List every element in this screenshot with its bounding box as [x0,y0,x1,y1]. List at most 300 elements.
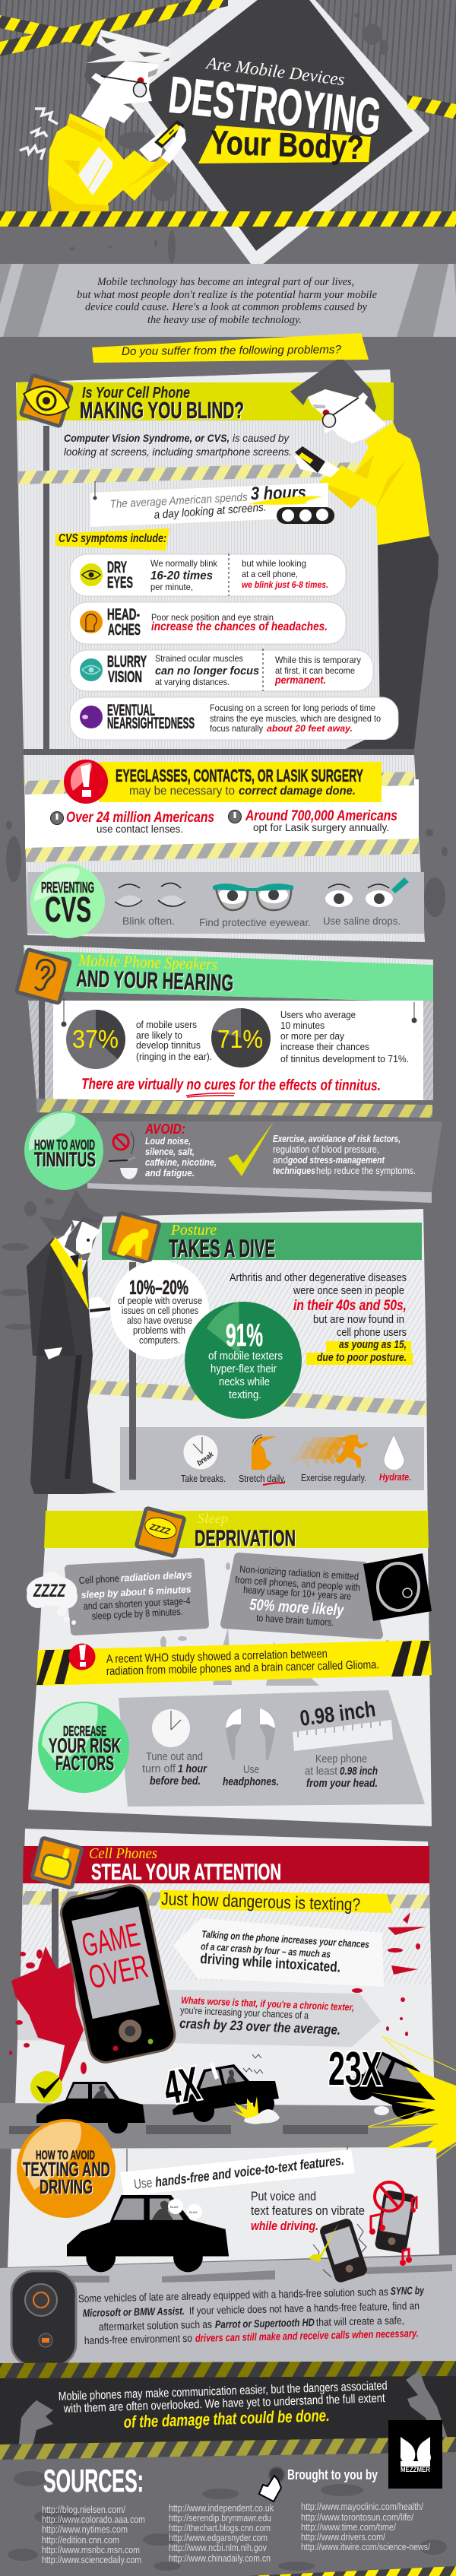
symptom: eventual nearsightedness [70,697,398,740]
dark divider bar [24,749,414,755]
section title: MAKING YOU BLIND? [80,397,244,424]
pole [129,1262,136,1480]
section sign: phone icon [32,1838,82,1888]
conclusion text: with them are often overlooked. We have yet to understand the full extent [63,2392,385,2416]
badge: how to avoid tinnitus: TINNITUS [34,1148,96,1171]
tip: blink: Blink often. [122,915,175,927]
callout: talking on the phone: driving while intoxicated. [200,1951,341,1976]
symptom: blurry vision: can no longer focus [155,665,259,677]
callout: talking on the phone [173,1918,384,1987]
header band [102,1223,422,1260]
speech bubbles [168,2199,202,2219]
silhouette right [406,2371,448,2441]
logo: mezzmer [388,2420,442,2489]
callout: chronic texter: crash by 23 over the average. [179,2016,340,2038]
stat text: 37 percent: of mobile users [136,1019,197,1030]
side stripes right [423,1001,433,1100]
sources column 2: http://www.ncbi.nlm.nih.gov [169,2542,267,2553]
pie chart: 91 percent: texting. [229,1388,261,1401]
banner: hands-free: Use [133,2175,153,2192]
section: avoid texting and driving [0,2119,456,2366]
icon: three clocks [277,507,334,524]
symptom: blurry vision: permanent. [274,674,326,686]
tip: tune out: before bed. [150,1775,201,1788]
bubble: brain tumour risk: Non-ionizing radiation is emitted [239,1563,359,1582]
bubble: overuse statistic [110,1261,209,1359]
bubble: brain tumour risk: heavy usage for 10+ years are [243,1584,351,1602]
section title: Is Your Cell Phone [82,385,190,401]
pie chart: 71 percent: 71% [217,1025,263,1053]
stat text: 71 percent [280,1009,409,1064]
cvs definition: looking at screens, including smartphone screens. [64,446,292,458]
who study banner [36,1640,432,1686]
title: are mobile devices destroying your body [166,53,384,167]
tips strip: risk factors [119,1690,425,1807]
panel background [16,370,414,749]
icon: check badge [30,2071,62,2103]
hands-free paragraph: that will create a safe, [316,2314,404,2328]
symptom: headaches: increase the chances of headaches. [151,620,328,633]
tip: saline drops: Use saline drops. [323,915,401,927]
sources column 3: http://www.time.com/time/ [301,2521,396,2533]
symptom: headaches: ACHES [108,621,141,639]
symptom: eventual nearsightedness: EVENTUAL [107,702,155,719]
icon: hand cursor [259,2467,284,2501]
avoid list: Loud noise, [145,1135,191,1147]
bubble: overuse statistic: problems with [133,1324,185,1336]
stat text: 71 percent: of tinnitus development to 71%. [280,1053,409,1064]
pain zigzags [20,109,58,160]
symptom: headaches [70,602,346,644]
splatter marks [6,820,448,917]
diagonal stripes [76,1260,426,1403]
cvs definition [64,432,292,458]
warning line: There are virtually no cures for the effects of tinnitus. [81,1076,381,1094]
pale caution tape upper [25,772,414,795]
road dashes [9,2125,368,2134]
tip: exercise regularly [290,1435,368,1483]
panel background [14,1829,435,2152]
badge: how to avoid texting and driving: HOW TO AVOID [36,2148,95,2162]
avoid list: silence, salt, [145,1146,195,1157]
illustration: man in dark suit [27,1217,116,1494]
vibrate advice: Put voice and [251,2189,316,2203]
section: posture and sleep panel [0,1190,432,1826]
section title [169,1222,275,1262]
bubble: overuse statistic: 10%–20% [129,1276,188,1299]
sources column 2: http://thechart.blogs.cnn.com [169,2522,271,2533]
hands-free paragraph: Microsoft or BMW Assist. [83,2305,185,2319]
diagonal stripes [21,1883,431,1984]
section title [76,950,234,996]
section: sources [8,2420,456,2576]
symptom: eventual nearsightedness: strains the eye muscles, which are designed to [210,713,381,724]
degenerative disease text: were once seen in people [293,1284,404,1297]
sources column 3: http://www.drivers.com/ [301,2531,385,2543]
intro text: Mobile technology has become an integral part of our lives, [97,276,354,288]
illustration: crashing car [173,2054,279,2122]
sources column 1: http://www.msnbc.msn.com [42,2544,140,2555]
grey tips strip [120,1427,424,1490]
callout: talking on the phone: of a car crash by four – as much as [201,1940,331,1960]
section title [89,1845,281,1885]
intro text: the heavy use of mobile technology. [147,314,302,326]
hands-free paragraph: Some vehicles of late are already equipped with a hands-free solution such as [78,2286,388,2305]
pie chart: 37 percent [66,1010,125,1069]
panel: avoid tinnitus [24,1111,442,1203]
panel background [28,1209,432,1826]
banner: hands-free [120,2149,355,2196]
symptom: blurry vision: VISION [108,668,142,686]
bubble: brain tumour risk: from cell phones, and people with [235,1574,360,1593]
image: hands-free device [11,2271,76,2366]
panel background [24,755,425,942]
rock [374,2106,389,2115]
icon: check mark [228,1121,274,1176]
degenerative disease text: Arthritis and other degenerative diseases [230,1271,407,1284]
intro panel [0,264,456,337]
sources column 2: http://www.chinadaily.com.cn [169,2552,271,2564]
tip: saline drops [323,877,409,927]
bubble: overuse statistic: issues on cell phones [122,1305,198,1316]
symptoms label: CVS symptoms include: [59,532,166,545]
tip: keep phone away: 0.98 inch [340,1765,378,1778]
crash impact [232,2096,277,2122]
road dashes [53,2264,452,2283]
avoid list [144,1121,217,1179]
avoid list: AVOID: [144,1121,185,1137]
tip: blink [115,883,185,927]
degenerative disease text: but are now found in [313,1313,404,1326]
symptom: blurry vision: at varying distances. [155,677,230,687]
main caution tape [0,211,456,227]
illustration: game over phone [58,1883,178,2065]
symptom: blurry vision: While this is temporary [275,655,361,665]
red splatter [9,1912,426,2087]
grey panel [87,1121,442,1192]
symptom: dry eyes: DRY [107,559,127,576]
section title: TAKES A DIVE [169,1235,275,1262]
pole [43,426,49,749]
tip: keep phone away: at least [305,1765,338,1778]
advice text: and [273,1154,288,1166]
section sign: zzzz [136,1508,185,1556]
symptom: dry eyes: EYES [107,574,133,592]
tip: stretch daily: Stretch daily. [239,1473,286,1484]
sources column 1: http://blog.nielsen.com/ [42,2504,125,2515]
speech bubbles: BLAH [189,2210,198,2214]
icon: coffee cup [120,1168,138,1179]
lower panel [8,2148,439,2267]
symptom: dry eyes: at a cell phone, [242,569,298,579]
stat: lasik [228,808,397,833]
section title: Posture [170,1222,217,1239]
warning diamond sign [122,0,426,265]
pole [39,1001,45,1100]
stat text: 71 percent: 10 minutes [280,1020,325,1031]
bubble: radiation delays sleep [68,1562,205,1632]
sources column 3: http://www.itwire.com/science-news/ [301,2541,430,2552]
symptom: eventual nearsightedness: Focusing on a screen for long periods of time [210,703,375,713]
label: 23x: 23X [328,2043,382,2095]
pie chart: 71 percent [211,1008,271,1068]
stat callout: 3 hours: a day looking at screens. [154,501,267,522]
sources column 2 [169,2502,274,2564]
who study banner: radiation from mobile phones and a brain cancer called Glioma. [106,1658,379,1678]
section: conclusion [0,2361,456,2460]
white zone [25,779,419,849]
icon: zzzz cloud: ZZZZ [33,1581,66,1601]
bubble: brain tumour risk: to have brain tumors. [256,1612,334,1628]
hands-free paragraph: aftermarket solution such as [99,2318,212,2333]
label: 4x: 4X [160,2057,204,2115]
vibrate advice: text features on vibrate [251,2203,365,2218]
conclusion text [59,2380,388,2432]
hands-free paragraph [78,2284,425,2346]
section title: STEAL YOUR ATTENTION [91,1860,281,1885]
brought to you by: Brought to you by [287,2467,378,2482]
splatter marks [69,13,388,264]
badge: decrease your risk factors: YOUR RISK [49,1734,121,1757]
grey splatter behind figure [0,1190,105,1330]
symptom: eventual nearsightedness: focus naturally [210,723,263,734]
sources column 3: http://www.mayoclinic.com/health/ [301,2501,423,2512]
stat: contact lenses: use contact lenses. [97,823,183,835]
advice text: techniques [273,1165,315,1176]
tip: keep phone away: Keep phone [315,1753,367,1765]
stat: lasik: Around 700,000 Americans [245,808,397,824]
badge: decrease your risk factors: DECREASE [63,1724,106,1739]
stat text: 37 percent: are likely to [136,1029,182,1041]
symptom: dry eyes: We normally blink [150,558,218,569]
road [0,2103,456,2149]
badge: how to avoid texting and driving [17,2119,116,2218]
pale caution tape [89,1380,426,1416]
badge: how to avoid texting and driving: DRIVING [40,2175,93,2198]
banner: hands-free: hands-free and voice-to-text features. [154,2152,345,2190]
intro text: device could cause. Here's a look at common problems caused by [85,301,367,313]
stat callout: 3 hours: 3 hours [251,483,306,504]
degenerative disease text: in their 40s and 50s, [293,1298,407,1314]
advice text: help reduce the symptoms. [316,1165,416,1176]
symptom: eventual nearsightedness: NEARSIGHTEDNESS [107,715,195,732]
section: blindness [16,360,439,749]
bubble: overuse statistic: computers. [139,1334,180,1346]
pie chart: 91 percent [185,1302,302,1419]
symptom: headaches: Poor neck position and eye strain [151,612,274,623]
heading: SOURCES: [43,2463,144,2498]
advice text: Exercise, avoidance of risk factors, [273,1133,401,1144]
illustration: man reading phone [290,360,439,749]
symptom: headaches: HEAD- [107,606,140,623]
tip: stretch daily [239,1435,286,1485]
sleep header band [44,1511,429,1548]
header band [24,950,433,1002]
pie chart: 91 percent: of mobile texters [208,1350,283,1363]
crossing caution tapes [0,0,456,119]
image: brain scan [363,1553,432,1621]
yellow warning banner [99,762,382,802]
tip: keep phone away: 0.98 inch [299,1697,377,1731]
vibrate advice [251,2189,365,2233]
pins [62,998,416,1026]
header band [23,1846,429,1883]
tip: tune out: turn off [142,1762,176,1775]
badge: decrease your risk factors: FACTORS [55,1752,114,1775]
illustration: flipped car [350,2051,448,2119]
badge: how to avoid tinnitus: HOW TO AVOID [34,1137,95,1153]
splatter marks [160,1562,390,1686]
section sign: ear icon [16,949,71,1004]
pale caution tape [17,462,357,484]
callout: chronic texter: Whats worse is that, if you're a chronic texter, [181,1994,354,2013]
bubble: overuse statistic: of people with overuse [118,1295,202,1306]
icon: vibrating phone [309,2217,369,2284]
pins [125,2146,350,2184]
section sign: hunched figure [109,1213,160,1263]
vibrate advice: while driving. [251,2219,318,2233]
illustration: big car [67,2195,229,2272]
yellow warning banner: may be necessary to [129,785,235,798]
tip: eyewear [199,884,311,928]
sources column 3: http://www.torontosun.com/life/ [301,2511,413,2523]
icon: cigarette [109,1157,135,1161]
bubble: radiation delays sleep: Cell phone [78,1572,119,1586]
badge: preventing cvs: CVS [45,890,91,929]
bubble: radiation delays sleep: sleep by about 6 minutes [81,1583,192,1600]
tip: take breaks: break [195,1450,216,1467]
pie chart: 91 percent: hyper-flex their [211,1363,277,1375]
hands-free paragraph: If your vehicle does not have a hands-free feature, find an [189,2299,420,2317]
pie chart: 91 percent: 91% [226,1317,263,1353]
icon: no noise [113,1131,134,1154]
bubble: radiation delays sleep: sleep cycle by 8 minutes. [91,1606,183,1622]
badge: how to avoid texting and driving: TEXTING AND [23,2158,110,2181]
tip: exercise regularly: Exercise regularly. [301,1472,366,1483]
section: attention [0,1829,456,2196]
tip: keep phone away: from your head. [306,1777,378,1790]
stat text: 71 percent: Users who average [280,1009,356,1020]
dark panel [0,2371,456,2450]
symptom: eventual nearsightedness: about 20 feet away. [267,723,353,734]
section title: Sleep [198,1511,228,1526]
callout: chronic texter: you're increasing your chances of a [180,2004,309,2021]
symptom: dry eyes [70,554,346,596]
symptom: blurry vision: Strained ocular muscles [155,653,243,664]
bubble: overuse statistic: also have overuse [127,1315,192,1326]
tip: hydrate: Hydrate. [379,1471,411,1483]
badge: decrease your risk factors [38,1702,129,1793]
advice text [273,1133,416,1176]
icon: muted phone with notes [369,2182,416,2266]
logo: mezzmer: MEZZMER [401,2466,430,2473]
symptom: dry eyes: but while looking [242,558,306,569]
striped header background [0,0,456,211]
stat text: 37 percent: (ringing in the ear). [136,1051,212,1062]
sources column 3 [301,2501,430,2552]
stat: lasik: opt for Lasik surgery annually. [253,821,389,833]
stat: contact lenses [50,810,214,835]
stat callout: 3 hours [90,481,334,527]
bottom caution tape [247,2566,456,2576]
tip: take breaks [181,1436,226,1484]
title: are mobile devices destroying your body: Are Mobile Devices [204,53,346,89]
symptoms label [55,528,169,550]
olive caution tape [0,2361,456,2378]
callout: talking on the phone: Talking on the phone increases your chances [201,1928,369,1950]
section title [80,385,244,424]
tip: keep phone away [293,1697,393,1790]
advice text: regulation of blood pressure, [273,1144,379,1155]
stat text: 71 percent: or more per day [280,1030,344,1042]
sources column 1: http://www.sciencedaily.com [42,2554,141,2565]
pole [52,1889,59,1992]
question banner: Do you suffer from the following problems? [122,343,342,358]
question banner: Just how dangerous is texting? [161,1889,361,1915]
pale caution tape [23,1891,429,1908]
symptom: blurry vision: at first, it can become [275,665,355,676]
speech bubbles: BLAH [170,2205,179,2209]
icon: zzzz cloud [27,1572,78,1625]
hands-free paragraph: SYNC by [391,2284,425,2297]
section title: Cell Phones [89,1845,157,1862]
stat text: 71 percent: increase their chances [280,1041,369,1052]
conclusion text: of the damage that could be done. [123,2406,330,2432]
sources column 1 [42,2504,145,2565]
pie chart: 37 percent: 37% [72,1025,119,1053]
illustration: normal car [36,2082,145,2133]
bubble: brain tumour risk [225,1557,378,1635]
section title: AND YOUR HEARING [76,965,234,996]
callout: chronic texter [17,1987,381,2047]
side stripes left [28,1001,53,1100]
illustration: man in yellow with phone [20,30,186,211]
white content box [53,1001,423,1100]
lower road [0,2255,456,2363]
symptom: blurry vision [70,649,373,691]
hands-free paragraph: Parrot or Supertooth HD [215,2316,315,2330]
question banner [92,333,369,363]
sources column 2: http://serendip.brynmawr.edu [169,2512,271,2524]
header band [17,382,394,420]
prevention strip [27,872,424,934]
section title: Mobile Phone Speakers [78,950,218,973]
degenerative disease text: as young as 15, [339,1338,407,1351]
sources column 2: http://www.independent.co.uk [169,2502,274,2514]
stat callout: 3 hours: The average American spends [109,491,248,511]
intro text [77,276,377,326]
icon: red exclamation [68,1644,96,1670]
tip: headphones: headphones. [223,1775,279,1788]
sources column 1: http://www.nytimes.com [42,2524,128,2535]
tip: take breaks: Take breaks. [181,1473,226,1484]
tip: tune out: Tune out and [146,1750,203,1763]
illustration: game over phone: OVER [86,1948,151,1996]
symptom: dry eyes: 16-20 times [150,569,213,582]
tip: headphones [223,1708,279,1788]
section: corrective measures [6,749,448,942]
sources column 1: http://www.colorado.aaa.com [42,2514,145,2525]
sources column 1: http://edition.cnn.com [42,2534,119,2546]
icon: red exclamation [64,760,108,804]
explosion burst [355,2036,456,2196]
splatter marks [8,2471,447,2571]
symptom: dry eyes: we blink just 6-8 times. [242,579,328,590]
section title [195,1511,296,1551]
hands-free paragraph: hands-free environment so [84,2332,192,2346]
stat: contact lenses: Over 24 million Americans [66,810,214,826]
title: are mobile devices destroying your body: Your Body? [210,124,364,167]
